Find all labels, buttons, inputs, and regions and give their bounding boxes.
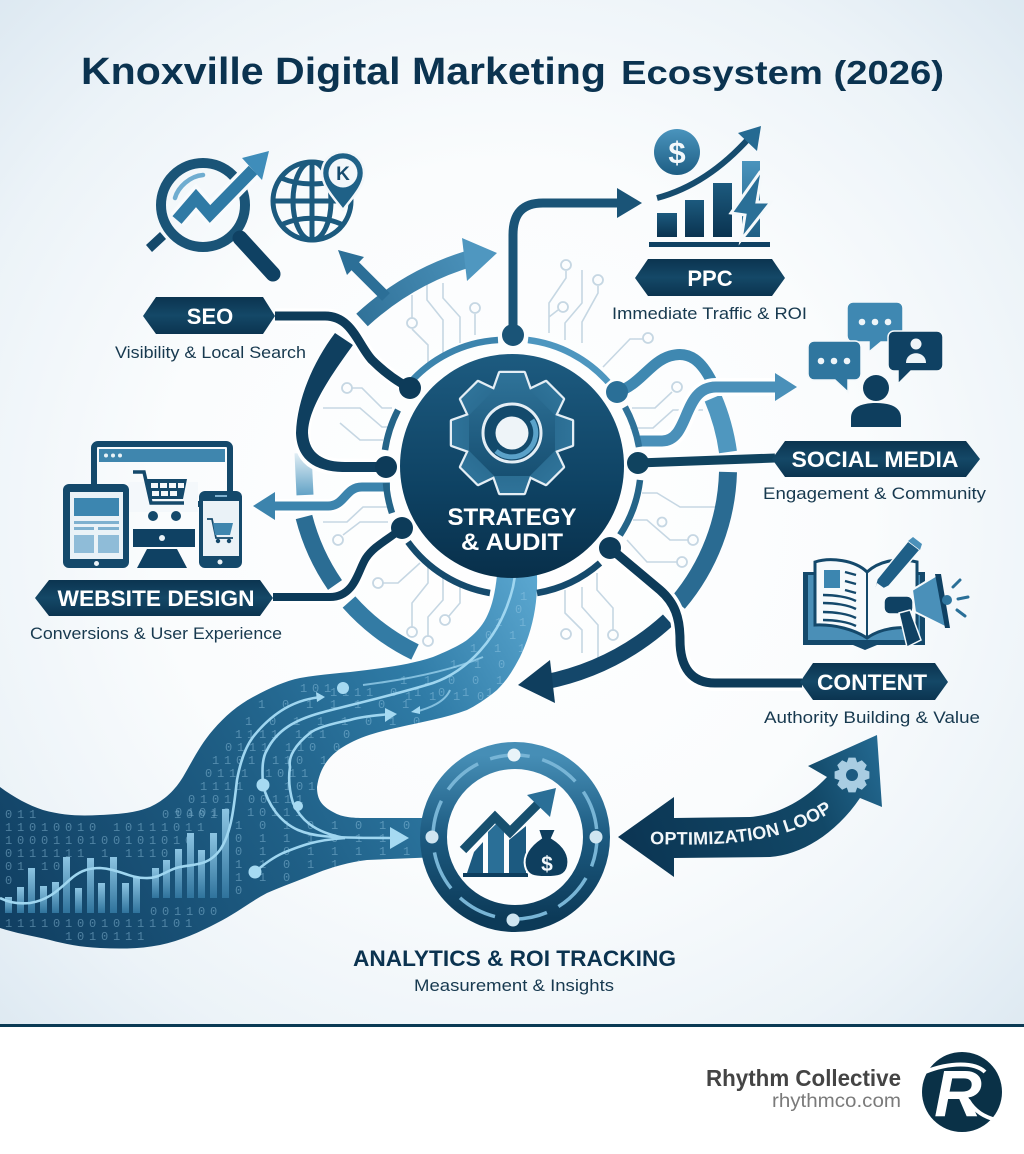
label: PPC xyxy=(635,259,785,296)
icon: globe with K pin xyxy=(273,152,364,240)
binary digits: 1 1 0 1 1 xyxy=(450,658,558,672)
binary digits: 1 1 1 0 0 1 xyxy=(405,690,537,704)
text: Content description: Authority Building & Value xyxy=(764,708,980,727)
binary digits: 1 1 1 xyxy=(495,616,555,630)
icon: open book, pencil and megaphone xyxy=(803,537,968,650)
label: Social Media xyxy=(772,441,980,477)
icon: devices with shopping carts xyxy=(63,444,242,568)
outer ring segments xyxy=(303,398,728,652)
inner segmented ring xyxy=(385,340,640,593)
binary digits: 1101 110 1 xyxy=(212,754,332,768)
connector nodes around hub xyxy=(375,324,649,559)
flow lines in stream xyxy=(0,570,516,903)
label: Website Design xyxy=(35,580,273,616)
icon: globe with K pin: K xyxy=(336,164,350,185)
binary digits: 0 1 0 1 1 1 1 1 1 xyxy=(235,845,439,859)
binary digits: 1111 0 1 0 1 1 xyxy=(330,686,498,700)
footer bar xyxy=(0,1024,1024,1154)
label: Content xyxy=(800,663,948,700)
title: Ecosystem (2026) xyxy=(621,54,944,91)
label: Social Media: SOCIAL MEDIA xyxy=(792,447,959,472)
hub label: & AUDIT xyxy=(461,529,563,556)
footer brand text: rhythmco.com xyxy=(772,1091,901,1112)
binary digits: 0 1 1 1 xyxy=(485,629,569,643)
arrow: optimization loop: OPTIMIZATION LOOP xyxy=(650,802,828,845)
label: SEO xyxy=(143,297,275,334)
hub label xyxy=(448,504,576,556)
footer logo: R xyxy=(934,1056,982,1130)
binary digits: 01 10 xyxy=(5,860,65,874)
connector: hub to PPC arrow xyxy=(513,188,642,335)
icon: PPC chart with dollar coin xyxy=(649,126,771,247)
bar chart in stream xyxy=(5,809,229,913)
binary digits: 1111010010111101 xyxy=(5,917,197,931)
footer brand text: Rhythm Collective xyxy=(706,1065,901,1091)
text: Website Design description: Conversions & User Experience xyxy=(30,624,282,643)
panel: Strategy & Audit hub xyxy=(400,354,624,578)
circuit traces behind hub xyxy=(323,260,715,660)
binary digits: 0 xyxy=(235,884,247,898)
binary digits: 0 xyxy=(5,874,17,888)
binary digits: 001100 xyxy=(150,905,222,919)
label: PPC: PPC xyxy=(687,266,733,291)
binary digits: 1111 1 101 xyxy=(200,780,320,794)
binary digits: 01001 xyxy=(162,808,222,822)
connector: left dark loop into hub xyxy=(296,333,385,472)
connector: content to hub xyxy=(610,548,802,683)
data stream xyxy=(0,570,569,949)
icon: growth chart and money bag xyxy=(463,788,568,877)
icon: gear xyxy=(452,373,572,493)
binary digits: 0111 1011 xyxy=(205,767,313,781)
binary digits: 1111 111 0 xyxy=(235,728,355,742)
connector: SEO to hub xyxy=(275,316,410,388)
binary digits: 1000110100101010 xyxy=(5,834,197,848)
text: PPC description: Immediate Traffic & ROI xyxy=(612,304,807,323)
footer brand text xyxy=(706,1065,901,1112)
binary digits: 1 1 0 0 1 1 xyxy=(400,674,532,688)
label: Content: CONTENT xyxy=(817,670,928,695)
text: Analytics description: Measurement & Insights xyxy=(414,976,614,995)
text: SEO description: Visibility & Local Search xyxy=(115,343,306,362)
text: Social Media description: Engagement & Community xyxy=(763,484,987,503)
binary digits: 1 1 1 1 xyxy=(470,642,554,656)
label: Website Design: WEBSITE DESIGN xyxy=(58,586,255,611)
binary digits: 1 0 1 1 1 0 1 0 xyxy=(245,715,425,729)
binary digits: 0111 110 0 xyxy=(225,741,345,755)
arrow: optimization loop xyxy=(618,735,882,877)
connector: hub wave into upper-right ring xyxy=(617,354,712,392)
footer logo xyxy=(922,1052,1002,1132)
icon: magnifier with growth arrow xyxy=(146,151,273,274)
binary digits: 101 xyxy=(300,682,336,696)
title: Knoxville Digital Marketing xyxy=(81,51,606,93)
hub label: STRATEGY xyxy=(448,504,576,531)
binary digits: 11010010 10111011 xyxy=(5,821,209,835)
binary digits: 1 1 0 1 1 1 xyxy=(235,858,367,872)
binary digits: 0 1 1 1 0 1 1 xyxy=(235,832,391,846)
panel: analytics ring xyxy=(426,748,602,926)
label: SEO: SEO xyxy=(187,304,233,329)
arrow: lower ring arrow pointing to data stream xyxy=(518,620,668,703)
binary digits: 0111111 1 1110 xyxy=(5,847,173,861)
binary digits: 1 0 1 1 1 0 1 xyxy=(258,698,414,712)
binary digits: 1 xyxy=(520,590,532,604)
binary digits: 011 xyxy=(5,808,41,822)
binary digits: 1 1 0 xyxy=(235,871,295,885)
flow arrowheads and nodes xyxy=(248,682,420,878)
binary digits: 0101 00111 xyxy=(188,793,308,807)
binary digits: 1 0 1 0 1 0 1 0 xyxy=(235,819,415,833)
arrow: hub to social media xyxy=(640,373,797,441)
icon: social media bubbles and person xyxy=(808,302,943,427)
title xyxy=(81,51,944,93)
binary digits xyxy=(5,590,569,944)
icon: growth chart and money bag: $ xyxy=(541,853,553,876)
label: Analytics & ROI Tracking: ANALYTICS & ROI TRACKING xyxy=(353,946,676,971)
arrow: hub to website design xyxy=(253,487,390,520)
arrow: upper ring arrow pointing right xyxy=(362,238,497,320)
binary digits: 01010 10111 xyxy=(175,806,307,820)
connector: website design to hub xyxy=(273,528,402,597)
binary digits: 1010111 xyxy=(65,930,149,944)
icon: PPC chart with dollar coin: $ xyxy=(668,135,686,170)
connector: social media to hub xyxy=(638,458,775,463)
arrow: branch pointing to SEO icons xyxy=(338,250,386,297)
binary digits: 0 1 xyxy=(515,603,551,617)
